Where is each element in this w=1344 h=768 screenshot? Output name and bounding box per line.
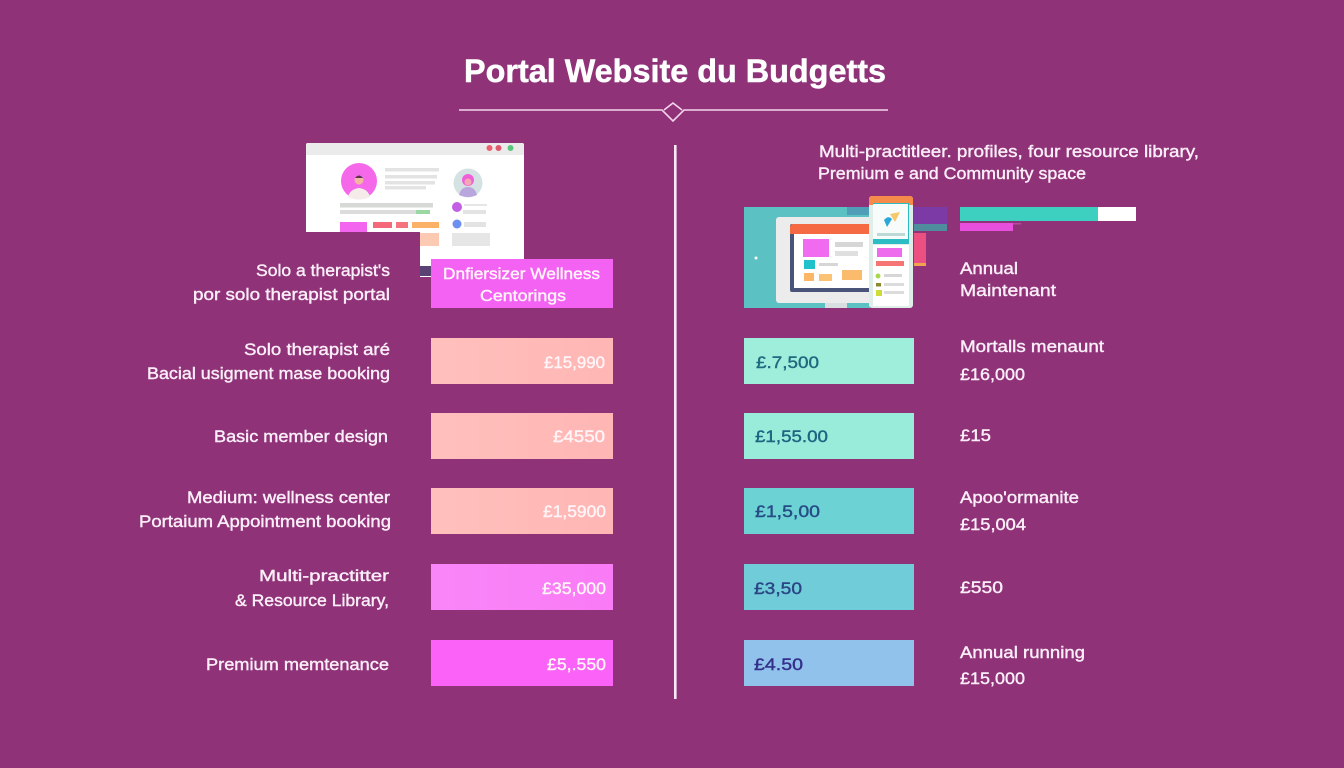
bar: 1,5900: £1,5900 (543, 502, 606, 521)
label: row 3 (960, 489, 1079, 534)
bar: 4.50 (744, 640, 914, 686)
label: row 1: £16,000 (960, 366, 1025, 384)
label: tier 5: & Resource Library, (235, 592, 389, 610)
left tier labels (139, 262, 391, 674)
label: row 3: Apoo'ormanite (960, 489, 1079, 507)
label: tier 3: Basic member design (214, 428, 388, 446)
bar: .7,500 (744, 338, 914, 384)
right cost bars (744, 338, 914, 686)
title divider with diamond (459, 103, 888, 121)
bar: 35,000: £35,000 (542, 579, 606, 598)
bar: 3,50 (744, 564, 914, 610)
label: tier 5: Multi-practitter (259, 568, 390, 585)
label: tier 4 (139, 489, 391, 531)
bar: 3,50: £3,50 (754, 579, 802, 598)
label: row 5: Annual running (960, 644, 1085, 662)
label: tier 6: Premium memtenance (206, 656, 389, 674)
feature summary text (818, 143, 1199, 183)
bar: 1,5,00: £1,5,00 (755, 502, 820, 521)
label: row 1: Mortalls menaunt (960, 338, 1104, 356)
label: row 4: £550 (960, 579, 1003, 597)
right maintenance labels (960, 260, 1104, 688)
bar: 35,000 (431, 564, 613, 610)
bar: 1,5,00 (744, 488, 914, 534)
label: tier 5 (235, 568, 390, 610)
feature summary text: Multi-practitleer. profiles, four resource library, (819, 143, 1199, 161)
label: tier 2 (147, 341, 390, 383)
illustration: desktop and mobile portal (744, 196, 947, 308)
label: row 3: £15,004 (960, 516, 1026, 534)
central vertical divider (674, 145, 677, 699)
highlighted heading box: wellness center: Dnfiersizer Wellness (443, 266, 600, 283)
feature summary text: Premium e and Community space (818, 165, 1086, 183)
bar: 4550 (431, 413, 613, 459)
left cost bars (431, 338, 613, 686)
legend bars (960, 207, 1136, 231)
bar: 4550: £4550 (553, 427, 605, 446)
label: annual maintenance heading (960, 260, 1056, 300)
bar: 4.50: £4.50 (754, 655, 803, 674)
label: tier 2: Solo therapist aré (244, 341, 390, 359)
title: Portal Website du Budgetts (464, 53, 886, 89)
bar: 5,.550 (431, 640, 613, 686)
label: tier 4: Medium: wellness center (187, 489, 391, 507)
highlighted heading box: wellness center (431, 259, 613, 308)
bar: 1,55.00 (744, 413, 914, 459)
label: row 2: £15 (960, 427, 991, 445)
label: annual maintenance heading: Maintenant (960, 282, 1056, 300)
label: row 5: £15,000 (960, 670, 1025, 688)
bar: .7,500: £.7,500 (756, 353, 819, 372)
label: tier 1: Solo a therapist's (256, 262, 390, 280)
label: tier 1: por solo therapist portal (193, 286, 390, 304)
bar: 1,5900 (431, 488, 613, 534)
bar: 1,55.00: £1,55.00 (755, 427, 828, 446)
icon: client avatar (454, 168, 482, 198)
label: row 5 (960, 644, 1085, 688)
label: tier 2: Bacial usigment mase booking (147, 365, 390, 383)
bar: 15,990: £15,990 (544, 353, 605, 372)
bar: 5,.550: £5,.550 (547, 655, 606, 674)
illustration: solo therapist portal browser window (306, 143, 524, 277)
icon: therapist avatar (341, 163, 377, 200)
label: tier 1 (193, 262, 390, 304)
highlighted heading box: wellness center: Centorings (480, 288, 566, 305)
label: tier 4: Portaium Appointment booking (139, 513, 391, 531)
label: annual maintenance heading: Annual (960, 260, 1018, 278)
label: row 1 (960, 338, 1104, 384)
bar: 15,990 (431, 338, 613, 384)
icon: mobile phone (869, 196, 913, 308)
